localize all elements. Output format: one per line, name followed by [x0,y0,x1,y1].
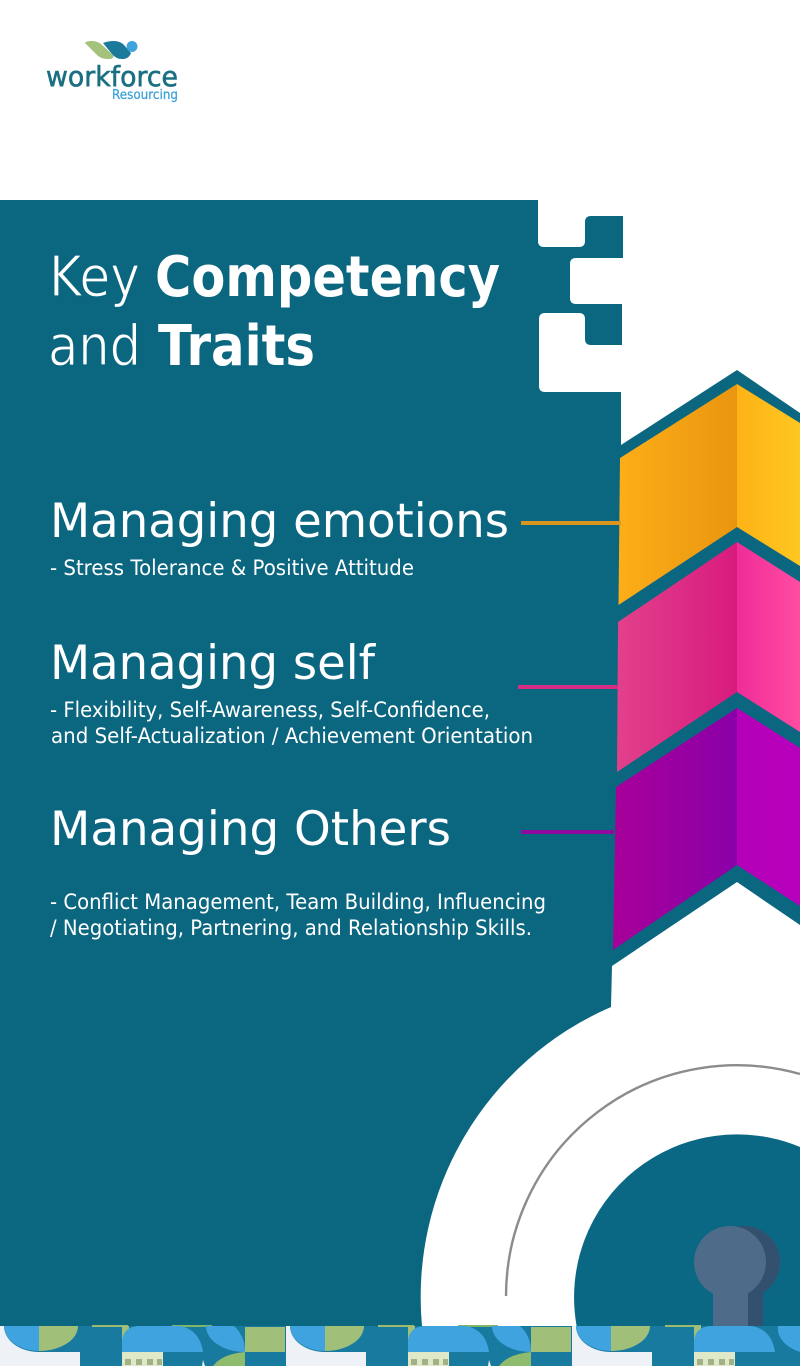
logo: workforce resourcing: Resourcing [112,88,178,103]
section: managing self: and Self-Actualization / Achievement Orientation [51,724,533,748]
bottom pattern strip [0,1325,800,1366]
title: Key [49,245,140,310]
title: Competency [155,245,500,310]
section: managing self: - Flexibility, Self-Awareness, Self-Confidence, [50,698,490,722]
section: managing others: Managing Others [50,802,451,857]
section: managing self [50,636,533,748]
icon: keyhole [694,1226,780,1326]
teal inner circle [574,1134,800,1326]
logo: workforce resourcing: workforce [46,60,178,93]
chevron: purple [613,708,800,950]
connector line: purple [521,830,614,834]
connector line: orange [521,521,621,525]
section: managing emotions [50,494,509,580]
title: Traits [158,314,315,379]
logo: workforce resourcing [46,41,178,103]
title: and [48,314,141,379]
white notched shape at top right [538,200,800,445]
section: managing others [50,802,546,940]
section: managing emotions: Managing emotions [50,494,509,549]
section: managing emotions: - Stress Tolerance & Positive Attitude [50,556,414,580]
title [48,245,500,379]
section: managing others: / Negotiating, Partnering, and Relationship Skills. [50,916,532,940]
connector line: pink [518,685,618,689]
chevron: orange [618,384,800,605]
section: managing self: Managing self [50,636,376,691]
section: managing others: - Conflict Management, Team Building, Influencing [50,890,546,914]
chevron: pink [617,542,800,772]
grey arc [506,1065,800,1296]
white lock body [421,882,800,1326]
